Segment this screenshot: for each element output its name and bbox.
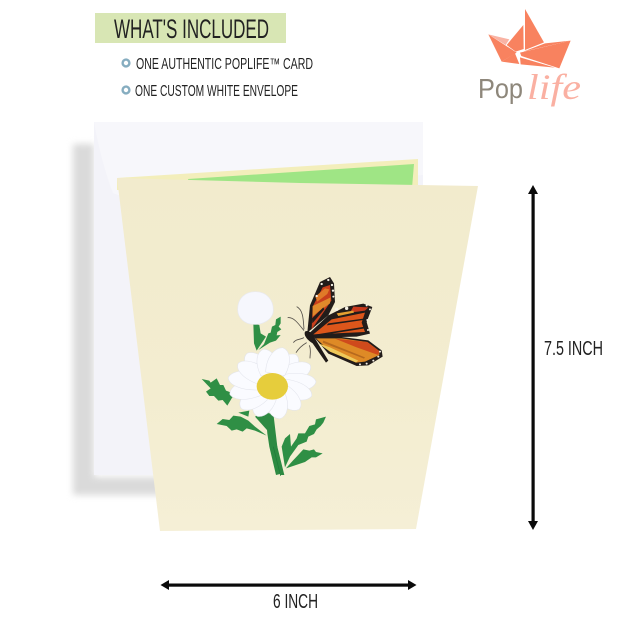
antennae and legs	[288, 307, 310, 358]
stems	[255, 410, 284, 475]
heading: what's included: WHAT'S INCLUDED	[114, 14, 269, 44]
bud stem and leaves	[202, 317, 326, 468]
wing spots	[315, 279, 381, 365]
daisy petals	[226, 346, 316, 420]
label: 6 inch: 6 INCH	[273, 591, 318, 613]
illustration: daisy and butterfly	[202, 277, 383, 476]
logo: poplife boat: Pop	[478, 73, 523, 104]
butterfly	[288, 277, 383, 366]
card back panel	[117, 159, 418, 190]
left leaf	[202, 378, 235, 406]
logo: poplife boat: life	[527, 67, 581, 107]
bud	[238, 292, 273, 324]
logo: poplife boat	[478, 9, 581, 107]
hind wing	[314, 337, 383, 366]
body	[305, 331, 328, 363]
card	[117, 159, 478, 531]
mid wing	[307, 304, 372, 338]
arrow: width	[160, 580, 416, 590]
list: included items	[123, 56, 313, 100]
list: included items: ONE AUTHENTIC POPLIFE™ CARD	[136, 56, 313, 73]
heading: what's included	[95, 13, 286, 44]
list: included items: ONE CUSTOM WHITE ENVELOPE	[135, 83, 298, 100]
envelope shadow	[73, 144, 165, 495]
arrow: height	[528, 185, 538, 530]
right leaves	[282, 417, 326, 467]
card front panel	[117, 178, 478, 531]
fore wing	[307, 277, 335, 333]
daisy centre	[257, 373, 288, 400]
card green interior	[188, 164, 414, 188]
envelope	[94, 122, 423, 475]
